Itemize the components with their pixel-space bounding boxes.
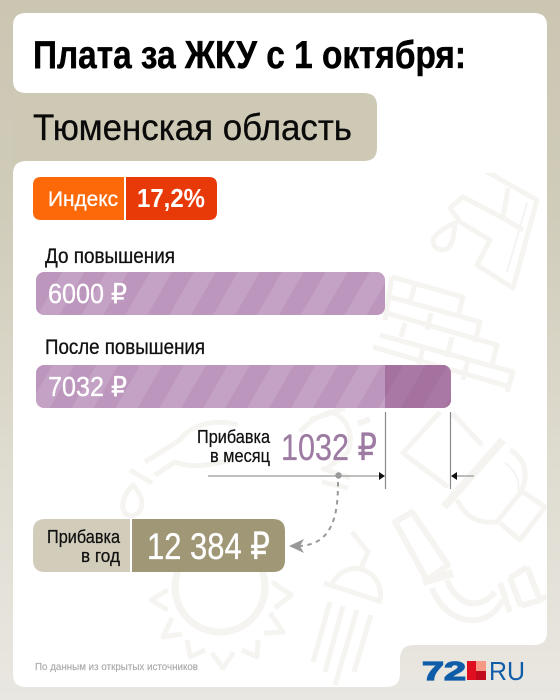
monthly increase label: Прибавка	[197, 426, 271, 447]
label: after: После повышения	[45, 336, 205, 359]
icon: sun	[148, 572, 294, 670]
label: before: До повышения	[45, 245, 175, 268]
index value	[126, 177, 217, 220]
index badge: Индекс	[48, 188, 118, 211]
region name: Тюменская область	[33, 107, 352, 148]
background icons	[123, 168, 547, 685]
bar: after	[36, 365, 451, 408]
title: Плата за ЖКУ с 1 октября:	[33, 34, 466, 77]
yearly value	[132, 519, 285, 572]
monthly increase label	[197, 426, 271, 466]
logo: 72.RU: RU	[489, 656, 525, 686]
icon: tap	[123, 408, 370, 516]
icon: funnel	[444, 440, 545, 540]
bar: after: 7032 ₽	[48, 371, 127, 402]
monthly increase value: 1032 ₽	[281, 427, 377, 468]
index badge	[33, 177, 217, 220]
icon: faucet	[433, 168, 537, 288]
yearly label	[33, 519, 130, 572]
dashed arrow	[289, 472, 342, 553]
dimension arrows	[208, 412, 474, 489]
panel: region tab	[13, 80, 377, 174]
bar: before	[36, 272, 385, 315]
monthly increase label: в месяц	[210, 445, 270, 466]
icon: bucket	[403, 412, 482, 487]
logo: 72.RU: 72	[422, 656, 466, 686]
yearly increase badge: в год	[81, 545, 120, 566]
icon: pipe	[395, 512, 547, 620]
yearly increase badge	[33, 519, 285, 572]
yearly increase badge: Прибавка	[47, 526, 121, 547]
logo: 72.RU	[422, 656, 525, 686]
yearly increase badge: 12 384 ₽	[147, 526, 270, 567]
bar: before: 6000 ₽	[48, 278, 127, 309]
source note: По данным из открытых источников	[35, 661, 198, 673]
icon: bricks	[373, 277, 513, 392]
index badge: 17,2%	[137, 183, 205, 213]
icon: shower	[313, 532, 382, 685]
index label	[33, 177, 124, 220]
